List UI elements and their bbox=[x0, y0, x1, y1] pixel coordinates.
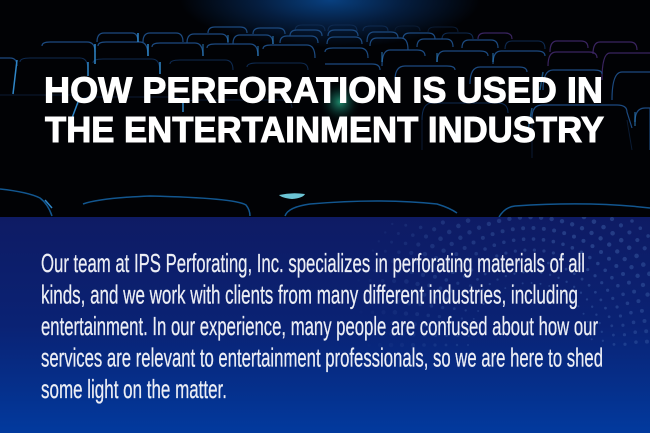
title: THE ENTERTAINMENT INDUSTRY bbox=[45, 109, 604, 150]
intro paragraph bbox=[41, 248, 603, 404]
near seat rows bbox=[0, 95, 650, 158]
title: HOW PERFORATION IS USED IN bbox=[44, 70, 603, 110]
halftone dot arcs bbox=[347, 217, 650, 345]
front row seat backs bbox=[0, 189, 650, 217]
green lens flare bbox=[318, 80, 362, 124]
panel: intro background bbox=[0, 217, 650, 433]
seat edge highlights bbox=[13, 33, 635, 130]
middle seat rows bbox=[0, 42, 650, 100]
icon: exit light bbox=[279, 193, 305, 199]
title bbox=[44, 70, 604, 150]
far seat rows bbox=[97, 25, 637, 54]
photo: dark cinema seating bbox=[0, 0, 650, 217]
intro paragraph: some light on the matter. bbox=[41, 374, 227, 404]
